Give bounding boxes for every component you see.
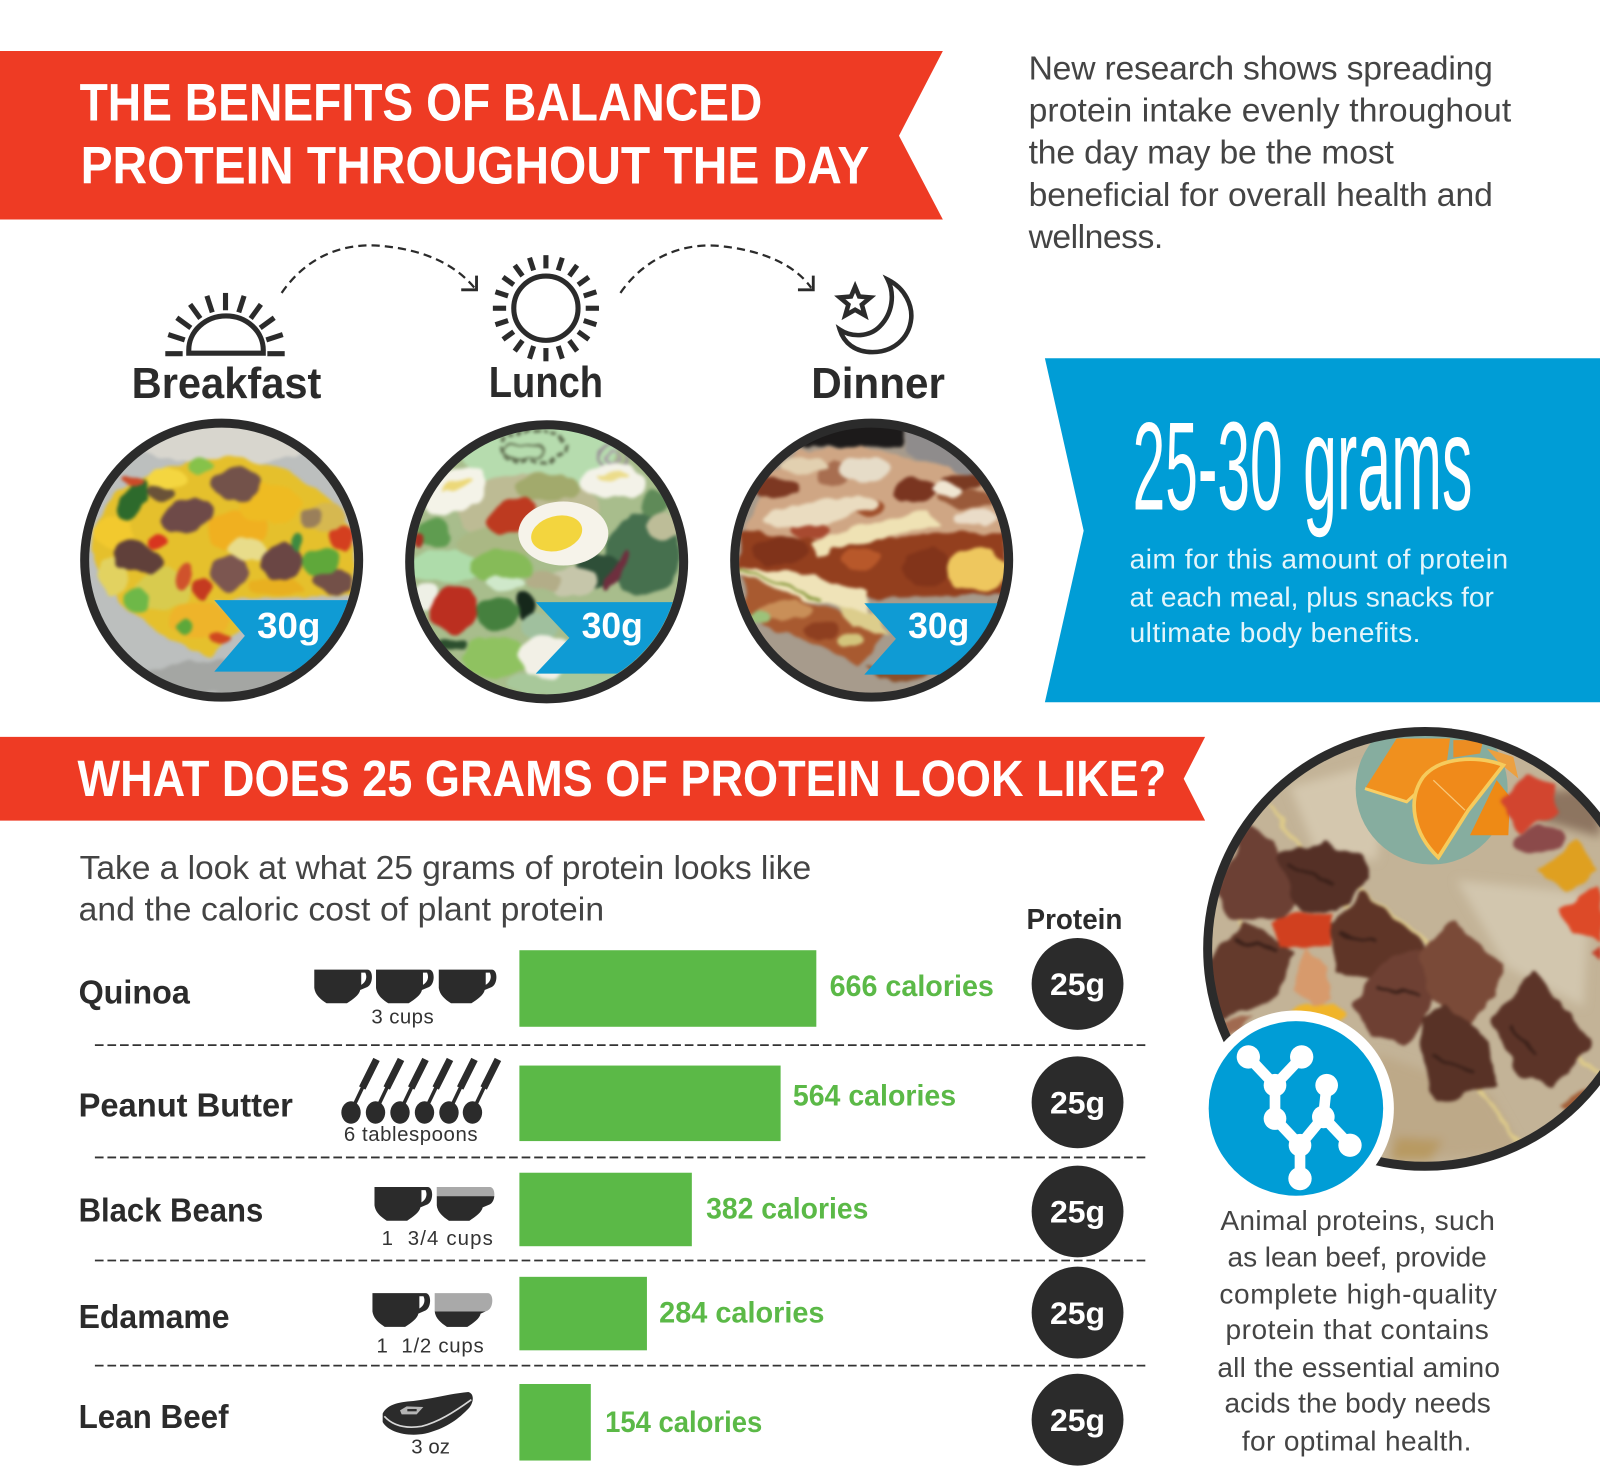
section intro text: and the caloric cost of plant protein	[79, 892, 604, 929]
icon: steak	[383, 1392, 473, 1435]
row: Black Beans: 382 calories	[706, 1193, 868, 1226]
section banner: what does 25 grams look like: WHAT DOES 25 GRAMS OF PROTEIN LOOK LIKE?	[78, 750, 1166, 807]
title banner: THE BENEFITS OF BALANCED	[80, 73, 762, 132]
icon: amino acid molecule badge	[1198, 1010, 1394, 1206]
panel: 25-30 grams callout: aim for this amount of protein	[1130, 543, 1508, 575]
meal label: Dinner: Dinner	[811, 359, 945, 408]
photo: dinner lasagna	[733, 417, 1010, 700]
panel: 25-30 grams callout: ultimate body benefits.	[1130, 617, 1420, 648]
row: Quinoa	[79, 938, 1123, 1030]
row: Black Beans	[79, 1166, 1123, 1257]
ribbon: lunch 30g	[536, 602, 673, 674]
photo: lunch quinoa salad	[407, 417, 687, 703]
row: Edamame	[79, 1267, 1123, 1358]
molecule	[1237, 1045, 1362, 1190]
bar: 154 calories	[519, 1384, 591, 1461]
row: Lean Beef: 3 oz	[411, 1436, 450, 1458]
row dividers	[95, 1045, 1148, 1366]
badge: 25g	[1032, 1267, 1123, 1358]
intro text block: wellness.	[1028, 219, 1163, 256]
bar: 564 calories	[519, 1066, 781, 1141]
row: Quinoa: 666 calories	[830, 970, 994, 1003]
intro text block	[1028, 51, 1512, 256]
row: Edamame: Edamame	[79, 1299, 230, 1336]
row: Quinoa: Quinoa	[79, 974, 190, 1011]
badge: 25g	[1032, 1166, 1123, 1257]
photo: beef skewers	[1200, 713, 1600, 1174]
title banner: PROTEIN THROUGHOUT THE DAY	[81, 137, 869, 196]
icon: three cups	[314, 970, 496, 1003]
text block: animal proteins note: protein that contains	[1226, 1314, 1489, 1345]
icon: six tablespoons	[341, 1059, 498, 1124]
text block: animal proteins note: Animal proteins, such	[1220, 1205, 1495, 1236]
ribbon: breakfast 30g: 30g	[257, 606, 320, 646]
meal label: Lunch: Lunch	[489, 358, 603, 407]
row: Peanut Butter: 6 tablespoons	[344, 1124, 478, 1146]
intro text block: protein intake evenly throughout	[1029, 92, 1512, 129]
intro text block: beneficial for overall health and	[1029, 177, 1493, 214]
section intro text	[79, 850, 811, 929]
title banner	[0, 51, 943, 219]
badge: 25g	[1032, 1056, 1123, 1148]
icon: moon and star	[840, 280, 911, 352]
icon: one and three quarter cups	[374, 1187, 494, 1221]
text block: animal proteins note: as lean beef, provide	[1228, 1242, 1487, 1273]
intro text block: the day may be the most	[1029, 134, 1395, 171]
arrow: lunch to dinner	[620, 245, 813, 293]
section banner: what does 25 grams look like	[0, 737, 1205, 821]
egg	[518, 501, 608, 565]
bar: 382 calories	[519, 1173, 692, 1246]
ribbon: dinner 30g	[864, 603, 1002, 675]
bar: 284 calories	[519, 1277, 647, 1350]
intro text block: New research shows spreading	[1029, 51, 1493, 88]
row: Edamame: 284 calories	[659, 1297, 824, 1330]
badge: 25g: 25g	[1050, 1194, 1105, 1230]
badge: 25g: 25g	[1050, 966, 1105, 1002]
photo: breakfast egg scramble	[83, 417, 360, 700]
panel: 25-30 grams callout: at each meal, plus snacks for	[1130, 581, 1494, 612]
row: Quinoa: 3 cups	[371, 1007, 434, 1029]
row: Lean Beef: 154 calories	[605, 1406, 762, 1439]
text block: animal proteins note: for optimal health.	[1242, 1425, 1471, 1456]
row: Lean Beef	[79, 1374, 1123, 1466]
text block: animal proteins note: all the essential amino	[1217, 1352, 1500, 1383]
badge: 25g	[1032, 1374, 1123, 1466]
row: Peanut Butter: Peanut Butter	[79, 1088, 293, 1125]
badge: 25g: 25g	[1050, 1085, 1105, 1121]
ribbon: breakfast 30g	[214, 600, 352, 672]
icon: sun	[493, 255, 599, 361]
icon: one and a half cups	[372, 1293, 492, 1327]
row: Lean Beef: Lean Beef	[79, 1399, 229, 1436]
text block: animal proteins note	[1217, 1205, 1500, 1456]
row: Edamame: 1 1/2 cups	[377, 1335, 484, 1357]
arrow: breakfast to lunch	[282, 245, 477, 293]
text block: animal proteins note: acids the body needs	[1224, 1388, 1491, 1419]
column heading: Protein: Protein	[1027, 904, 1122, 936]
row: Black Beans: 1 3/4 cups	[382, 1228, 493, 1250]
ribbon: lunch 30g: 30g	[582, 606, 643, 646]
icon: sunrise	[165, 293, 285, 354]
section intro text: Take a look at what 25 grams of protein looks like	[80, 850, 811, 887]
meal label: Breakfast: Breakfast	[132, 359, 322, 408]
panel: 25-30 grams callout: 25-30	[1133, 395, 1283, 536]
ribbon: dinner 30g: 30g	[908, 606, 969, 646]
badge: 25g	[1032, 938, 1123, 1030]
row: Peanut Butter	[79, 1056, 1123, 1148]
panel: 25-30 grams callout	[1045, 358, 1600, 702]
badge: 25g: 25g	[1050, 1295, 1105, 1331]
row: Black Beans: Black Beans	[79, 1193, 263, 1230]
text block: animal proteins note: complete high-quality	[1219, 1278, 1497, 1309]
row: Peanut Butter: 564 calories	[793, 1079, 956, 1112]
plate and oranges	[1356, 736, 1518, 864]
bar: 666 calories	[519, 950, 816, 1027]
badge: 25g: 25g	[1050, 1402, 1105, 1438]
